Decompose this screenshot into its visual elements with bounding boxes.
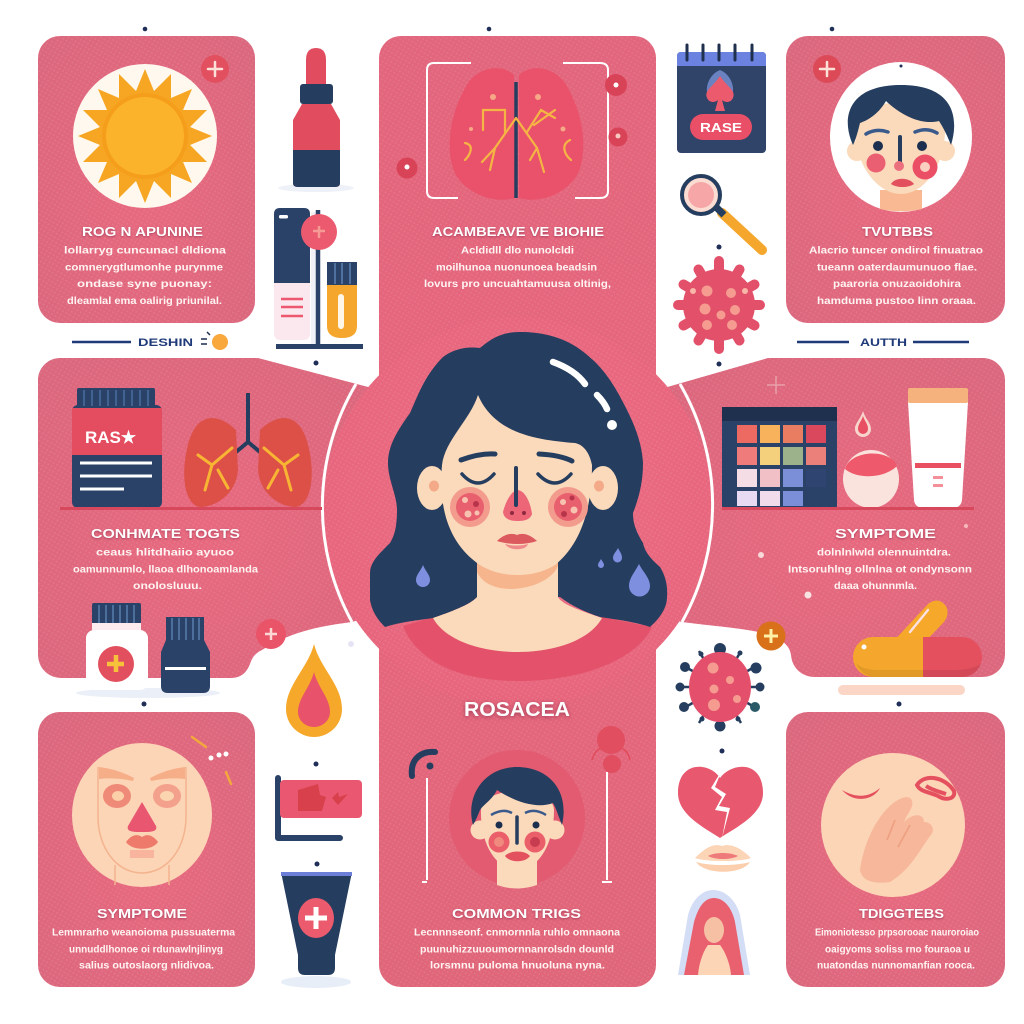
panel: central column	[379, 36, 656, 987]
text block: salius outoslaorg nlidivoa.	[79, 960, 214, 972]
heading: COMMON TRIGS	[452, 906, 581, 921]
icon: flag	[278, 778, 362, 838]
text block: tueann oaterdaumunuoo flae.	[817, 262, 977, 274]
text block	[815, 928, 979, 972]
text block	[424, 246, 611, 290]
cheek rash	[450, 487, 490, 527]
panel: bottom left symptoms	[38, 712, 255, 987]
icon: dropper bottle	[278, 48, 354, 192]
icon: sponge and drop	[843, 411, 899, 508]
text block: lorsmnu puloma hnuoluna nyna.	[430, 960, 605, 972]
icon: flame drop	[286, 644, 342, 737]
heading: ROG N APUNINE	[82, 224, 203, 239]
icon: sparkle	[767, 376, 785, 394]
panel: bottom right triggers	[786, 712, 1005, 987]
icon: medicine bottles	[76, 603, 220, 698]
text block: Acldidll dlo nunolcldi	[461, 246, 574, 256]
text block	[414, 928, 621, 972]
icon: virus red	[678, 261, 760, 349]
panel: top left sun	[38, 36, 255, 323]
icon: woman in halo	[678, 890, 750, 975]
ears	[417, 466, 447, 510]
icon: lungs	[184, 393, 312, 507]
icon: lips	[695, 845, 751, 872]
icon: hook on pole	[412, 752, 435, 882]
icon: jar: RAS★	[85, 428, 137, 447]
text block: Lecnnnseonf. cnmornnla ruhlo omnaona	[414, 928, 621, 938]
face	[441, 395, 592, 575]
illustration: boy portrait	[830, 62, 972, 212]
group: right middle items	[722, 376, 982, 695]
central circle	[322, 317, 713, 707]
shelf	[60, 507, 322, 510]
text block: Alacrio tuncer ondirol finuatrao	[809, 246, 983, 256]
text block: dolnlnlwld olennuintdra.	[817, 548, 951, 558]
title: Rosacea: ROSACEA	[464, 699, 570, 721]
text block: oamunnumlo, llaoa dlhonoamlanda	[73, 564, 259, 576]
text block: moilhunoa nuonunoea beadsin	[436, 262, 597, 274]
shelf	[722, 507, 974, 510]
icon: red spots	[396, 74, 628, 178]
neck and chest	[433, 555, 602, 652]
icon: lungs with brackets	[427, 63, 608, 200]
text block: Intsoruhlng ollnlna ot ondynsonn	[788, 564, 972, 576]
heading: TDIGGTEBS	[859, 906, 944, 921]
small lavender dot	[348, 641, 354, 647]
hair highlights	[553, 362, 607, 409]
text block: hamduma pustoo linn oraaa.	[817, 296, 976, 307]
icon: plus badge	[756, 622, 786, 650]
icon: calendar	[677, 45, 766, 153]
icon: sparkle specks	[192, 737, 231, 784]
text block	[788, 548, 972, 592]
shirt	[403, 617, 652, 681]
panel: top right boy	[786, 36, 1005, 323]
heading: SYMPTOME	[835, 526, 936, 541]
text block: comnerygtlumonhe purynme	[65, 262, 224, 274]
icon: jar	[72, 388, 162, 508]
icon: red beads on pole	[592, 726, 630, 882]
text block: lollarryg cuncunacl dldiona	[64, 246, 227, 256]
text block: dleamlal ema oalirig priunilal.	[67, 296, 222, 307]
text block	[809, 246, 983, 307]
text block: paaroria onuzaoidohira	[833, 279, 962, 290]
text block	[52, 928, 236, 972]
text block: nuatondas nunnomanfian rooca.	[817, 960, 975, 972]
icon: phone and test tube	[274, 208, 363, 349]
text block: ceaus hlitdhaiio ayuoo	[96, 548, 234, 558]
illustration: woman with rosacea	[370, 332, 667, 681]
icon: sun	[73, 64, 217, 208]
tears	[416, 565, 430, 587]
illustration: face with rash	[72, 743, 212, 887]
icon: plus badge	[813, 55, 841, 83]
left divider label: DESHIN	[138, 337, 193, 349]
panel: middle right side	[664, 358, 1005, 677]
navy connector dots	[142, 27, 902, 866]
heading: SYMPTOME	[97, 906, 187, 921]
text block: puunuhizzuuoumornnanrolsdn dounld	[420, 944, 614, 956]
illustration: small face portrait	[449, 750, 585, 888]
icon: virus navy spikes	[676, 643, 764, 732]
brows and eyes	[461, 454, 572, 461]
group: left middle items	[60, 388, 322, 698]
text block: ondase syne puonay:	[77, 279, 212, 290]
icon: calendar: RASE	[700, 120, 742, 135]
right divider label: AUTTH	[860, 337, 907, 349]
decorative dots	[758, 524, 968, 598]
panel: middle left side	[38, 358, 372, 678]
heading: CONHMATE TOGTS	[91, 526, 240, 541]
icon: plus badge	[201, 55, 229, 83]
text block	[73, 548, 259, 592]
text block: Lemmrarho weanoioma pussuaterma	[52, 928, 236, 938]
icon: cream tube	[908, 388, 968, 508]
icon: makeup palette	[722, 407, 837, 509]
text block: lovurs pro uncuahtamuusa oltinig,	[424, 279, 611, 290]
icon: broken heart	[678, 767, 763, 838]
text block: unnuddlhonoe oi rdunawlnjlinyg	[69, 944, 223, 956]
text block: oaigyoms soliss rno fouraoa u	[825, 944, 970, 956]
mouth	[497, 534, 537, 544]
icon: ointment tube	[281, 872, 352, 988]
text block	[64, 246, 227, 307]
icon: plus badge	[256, 619, 286, 649]
text block: daaa ohunnmla.	[834, 581, 917, 592]
text block: onolosluuu.	[133, 581, 202, 592]
heading: ACAMBEAVE VE BIOHIE	[432, 224, 604, 239]
hair	[370, 332, 667, 627]
heading: TVUTBBS	[862, 224, 933, 239]
illustration: hand on cheek	[821, 753, 965, 897]
text block: Eimoniotesso prpsorooac nauroroiao	[815, 928, 979, 938]
nose	[503, 490, 532, 521]
left divider label	[72, 332, 228, 350]
icon: magnifying glass	[682, 176, 762, 250]
icon: capsules	[838, 600, 982, 695]
